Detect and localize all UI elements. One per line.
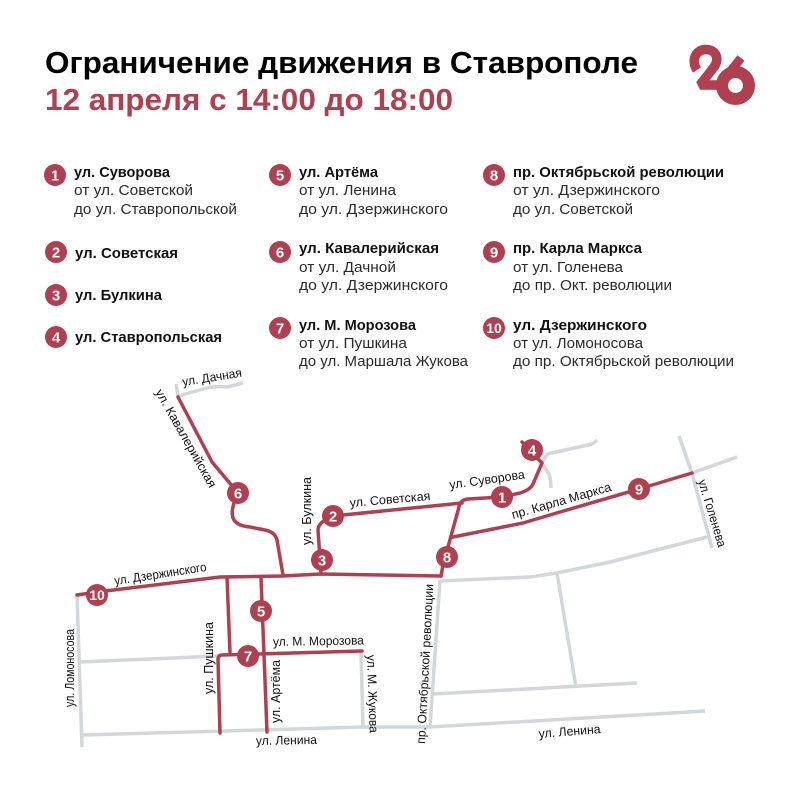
legend item 2 (45, 241, 178, 263)
legend item 6: до ул. Дзержинского (299, 277, 448, 294)
legend item 1: ул. Суворова (74, 164, 171, 181)
legend item 8: 8 (490, 168, 498, 184)
legend item 6: от ул. Дачной (299, 259, 396, 276)
legend item 7 (269, 317, 469, 370)
street labels: ул. Голенева (695, 478, 729, 549)
subtitle: date and time: 12 апреля с 14:00 до 18:00 (45, 83, 453, 117)
legend item 5: ул. Артёма (299, 164, 379, 181)
legend item 10: до пр. Октябрьской революции (513, 353, 734, 370)
legend item 4 (45, 326, 222, 348)
map markers: 1 (498, 490, 506, 506)
legend item 4: 4 (52, 330, 61, 346)
legend item 6: ул. Кавалерийская (299, 240, 439, 257)
legend item 7: от ул. Пушкина (299, 335, 408, 352)
map markers: 4 (528, 442, 537, 460)
legend item 5 (269, 164, 448, 218)
street labels: ул. Ленина (256, 733, 317, 748)
street labels: ул. Ленина (538, 722, 601, 741)
legend item 9: пр. Карла Маркса (513, 240, 643, 257)
street labels: ул. Булкина (300, 477, 314, 545)
route: пр. Карла Маркса (453, 473, 692, 537)
legend item 6 (269, 240, 448, 294)
route: пр. Октябрьской революции, Суворова, Ставропольская (441, 442, 542, 576)
street labels: ул. Артёма (269, 660, 283, 723)
legend item 9 (483, 240, 672, 294)
map (63, 366, 737, 748)
street labels: пр. Октябрьской революции (414, 584, 436, 744)
map markers: 3 (318, 552, 326, 570)
street labels: ул. Дзержинского (113, 560, 207, 588)
map markers: 7 (244, 648, 252, 666)
map markers: 6 (234, 486, 242, 502)
street labels: ул. Дачная (181, 366, 243, 389)
route: ул. Артёма (261, 578, 267, 732)
street labels (63, 366, 729, 748)
legend item 2: 2 (52, 244, 60, 262)
legend item 10: 10 (486, 320, 502, 336)
legend item 10: ул. Дзержинского (513, 317, 647, 334)
street labels: пр. Карла Маркса (510, 480, 613, 522)
legend item 5: 5 (276, 168, 284, 184)
legend item 9: от ул. Голенева (513, 259, 624, 276)
map markers: 2 (329, 508, 337, 526)
route: ул. Дзержинского (77, 574, 441, 595)
legend item 5: от ул. Ленина (299, 182, 397, 199)
legend item 3 (45, 284, 163, 306)
legend item 7: 7 (276, 320, 284, 338)
legend item 7: ул. М. Морозова (299, 317, 417, 334)
legend item 8: от ул. Дзержинского (513, 182, 660, 199)
legend item 6: 6 (276, 244, 284, 262)
street labels: ул. М. Морозова (273, 633, 364, 649)
legend item 4: ул. Ставропольская (75, 329, 222, 346)
legend item 1: от ул. Советской (74, 182, 193, 199)
route: ул. Пушкина и М. Морозова (218, 577, 362, 733)
street labels: ул. М. Жукова (364, 655, 381, 733)
legend item 2: ул. Советская (75, 245, 178, 262)
legend item 3: ул. Булкина (75, 287, 163, 304)
map markers (86, 439, 650, 667)
legend item 3: 3 (52, 288, 60, 304)
legend item 1: 1 (51, 168, 59, 184)
street labels: ул. Пушкина (202, 622, 216, 694)
street labels: ул. Ломоносова (63, 629, 77, 707)
map markers: 9 (635, 482, 643, 498)
legend item 1: до ул. Ставропольской (74, 201, 237, 218)
route: ул. Булкина и Советская (318, 503, 462, 574)
map markers: 5 (257, 604, 265, 620)
street labels: ул. Кавалерийская (152, 387, 219, 490)
legend item 9: 9 (490, 244, 498, 262)
legend item 5: до ул. Дзержинского (299, 201, 448, 218)
closed streets (red) (77, 397, 692, 733)
legend item 8: пр. Октябрьской революции (513, 164, 724, 181)
map markers: 10 (89, 587, 105, 603)
legend item 7: до ул. Маршала Жукова (299, 353, 469, 370)
title: Ограничение движения в Ставрополе (45, 46, 638, 80)
icon: 26 logo (694, 50, 749, 99)
open streets (grey) (77, 383, 737, 747)
street labels: ул. Советская (349, 489, 431, 510)
legend item 9: до пр. Окт. революции (513, 277, 672, 294)
legend item 1 (44, 164, 237, 218)
legend item 10 (483, 317, 734, 370)
map markers: 8 (443, 550, 451, 566)
legend (44, 164, 734, 370)
legend item 8 (483, 164, 724, 218)
legend item 10: от ул. Ломоносова (513, 335, 644, 352)
route: ул. Кавалерийская (178, 397, 283, 575)
street labels: ул. Суворова (448, 468, 526, 492)
legend item 8: до ул. Советской (513, 201, 633, 218)
